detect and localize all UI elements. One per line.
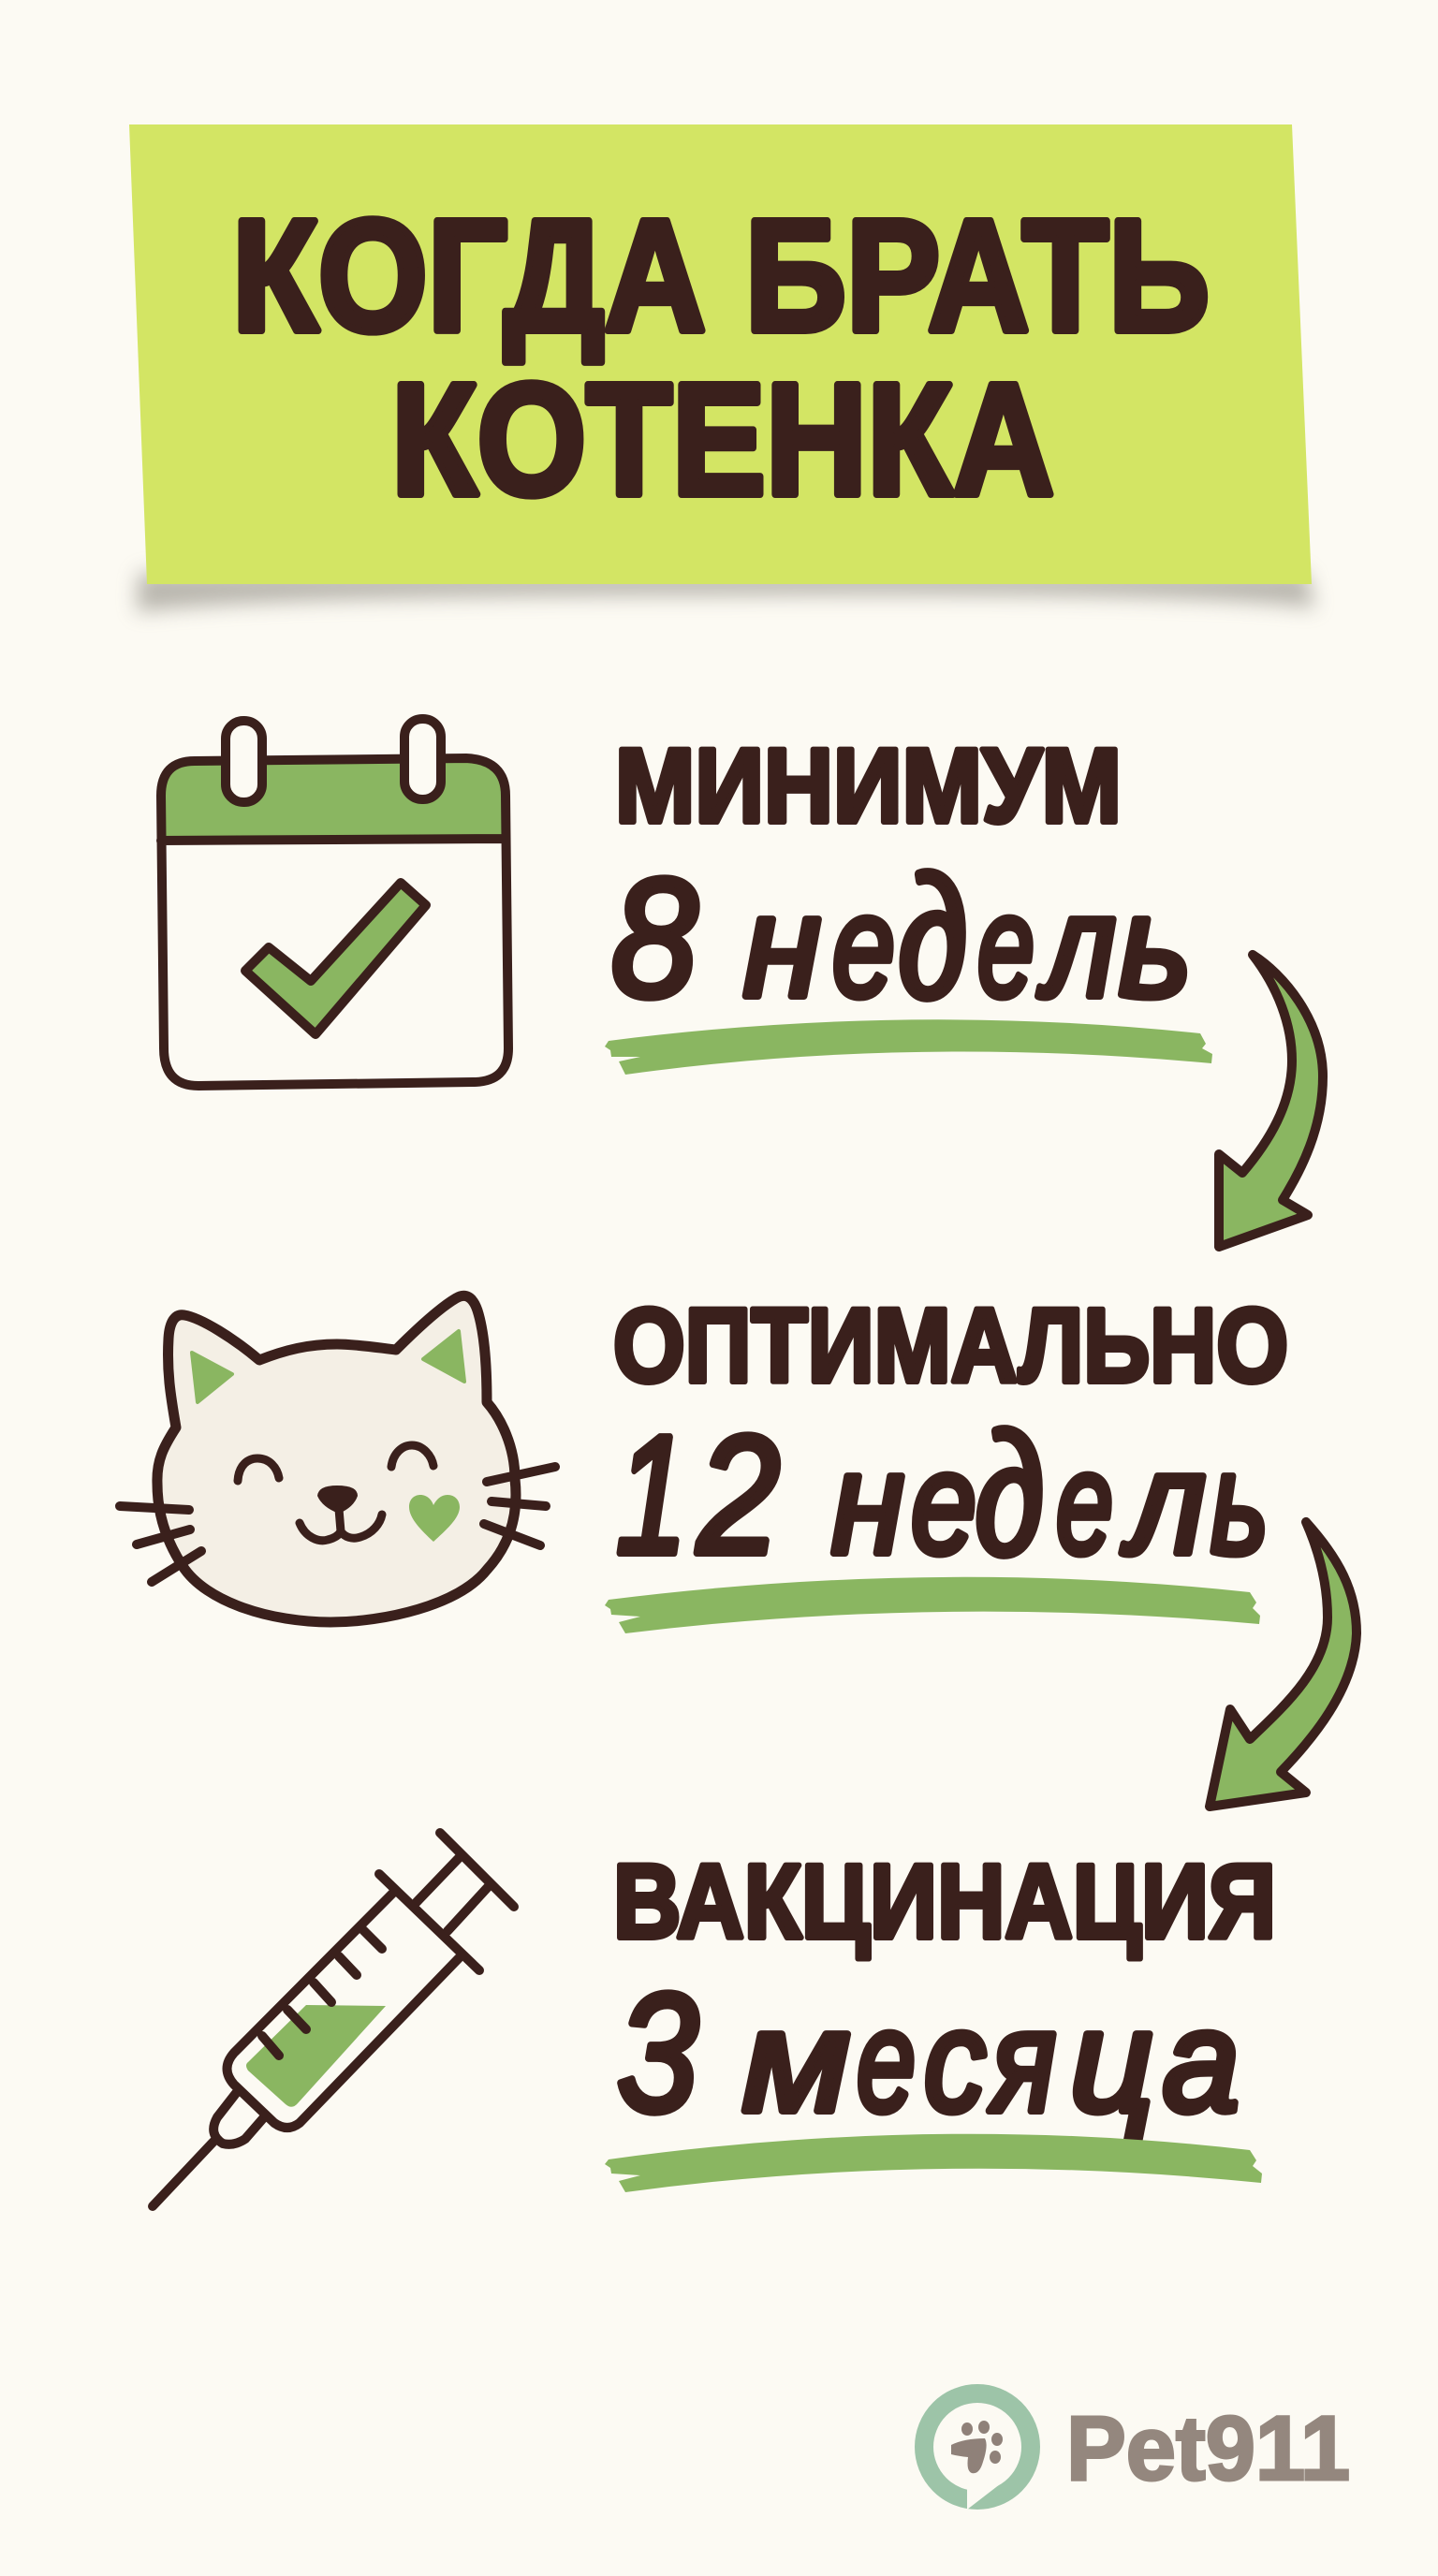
whiskers (120, 1467, 555, 1582)
logo ring with speech bubble tail (924, 2393, 1031, 2510)
label: minimum: МИНИМУМ (615, 727, 1122, 844)
value: 8 weeks: д (899, 839, 967, 1035)
logo wordmark: Pet911 (1066, 2397, 1350, 2499)
value: 8 weeks: е (977, 865, 1034, 1027)
arrow 1 (1219, 955, 1323, 1247)
value: 3 months: е (857, 1980, 916, 2142)
value: 12 weeks: 1 (616, 1401, 687, 1589)
logo: Pet911 (924, 2393, 1350, 2510)
value: 12 weeks: д (976, 1396, 1044, 1592)
value: 3 months: с (924, 1980, 986, 2142)
value: 3 months: я (989, 1980, 1056, 2142)
icon: syringe (153, 1833, 514, 2206)
value: 3 months: 3 (617, 1959, 698, 2147)
paw icon (951, 2421, 1003, 2473)
title text: КОГДА БРАТЬ (232, 187, 1210, 365)
title text: КОТЕНКА (391, 351, 1054, 529)
value: 12 weeks: е (911, 1422, 976, 1584)
title sticky note (129, 124, 1315, 612)
value: 8 weeks: 8 (611, 844, 697, 1032)
label: vaccination: ВАКЦИНАЦИЯ (613, 1843, 1276, 1960)
label: optimal: ОПТИМАЛЬНО (613, 1287, 1288, 1404)
icon: happy cat face (120, 1295, 555, 1622)
value: 3 months: а (1163, 1980, 1240, 2142)
value: 12 weeks: л (1121, 1422, 1206, 1584)
heart (409, 1495, 460, 1542)
ears inner (192, 1331, 464, 1402)
value: 3 months: м (742, 1980, 850, 2142)
value: 12 weeks: ь (1211, 1422, 1269, 1584)
underline brush stroke 3 (605, 2134, 1262, 2192)
icon: calendar with check mark (161, 719, 508, 1086)
value: 12 weeks: н (831, 1422, 904, 1584)
value: 8 weeks: е (832, 865, 895, 1027)
arrow 2 (1210, 1522, 1357, 1807)
value: 8 weeks: н (743, 865, 821, 1027)
underline brush stroke 1 (605, 1019, 1212, 1075)
value: 8 weeks: л (1037, 865, 1116, 1027)
value: 12 weeks: е (1056, 1422, 1113, 1584)
value: 12 weeks: 2 (696, 1401, 780, 1589)
underline brush stroke 2 (605, 1577, 1260, 1633)
eyes, nose, mouth (238, 1445, 433, 1541)
value: 3 months: ц (1070, 1980, 1154, 2142)
value: 8 weeks: ь (1119, 865, 1192, 1027)
title text (232, 187, 1210, 529)
